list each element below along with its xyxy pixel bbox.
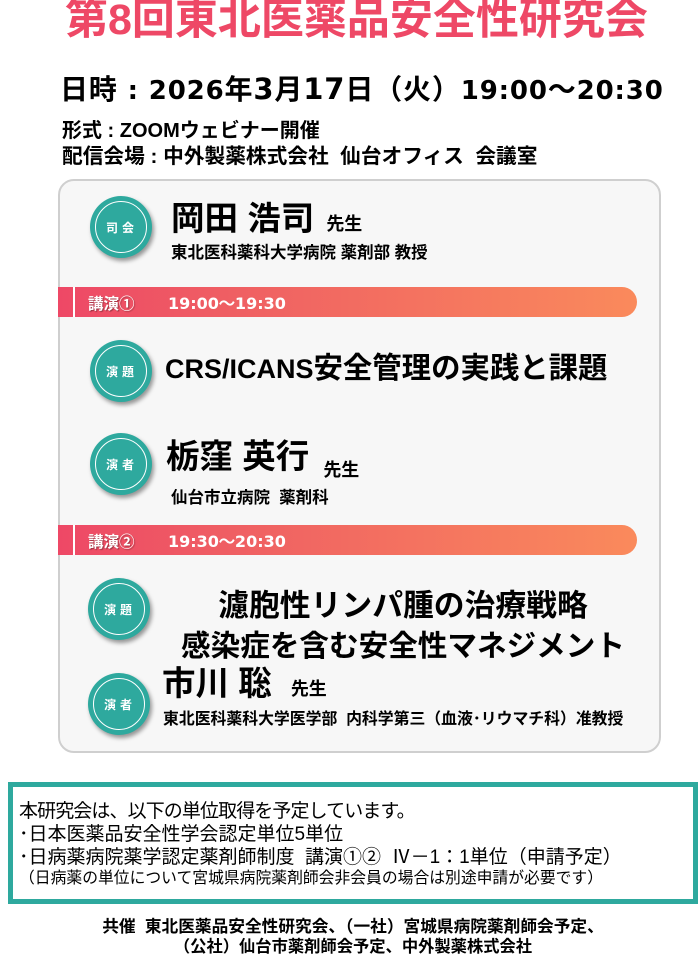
lecture 1 speaker badge (90, 433, 152, 495)
moderator affiliation: 東北医科薬科大学病院 薬剤部 教授 (171, 244, 428, 262)
lecture 2 speaker affiliation: 東北医科薬科大学医学部 内科学第三（血液･リウマチ科）准教授 (163, 711, 623, 728)
moderator name: 岡田 浩司 先生 (171, 201, 362, 238)
lecture 1 bar: 講演① (88, 296, 135, 313)
format and venue (62, 120, 537, 168)
moderator badge (90, 196, 152, 258)
moderator badge: 司会 (106, 221, 138, 235)
format and venue: 形式 : ZOOMウェビナー開催 (62, 120, 320, 142)
lecture 2 title (181, 588, 625, 663)
credits text: 本研究会は、以下の単位取得を予定しています。 (19, 801, 415, 822)
lecture 2 title: 濾胞性リンパ腫の治療戦略 (218, 588, 588, 623)
lecture 1 speaker name: 栃窪 英行 先生 (166, 439, 359, 480)
lecture 2 speaker badge: 演者 (104, 698, 136, 712)
date and time: 日時 : 2026年3月17日（火）19:00～20:30 (60, 72, 664, 106)
co-hosts (102, 917, 604, 955)
lecture 2 title badge (88, 578, 150, 640)
co-hosts: 共催 東北医薬品安全性研究会、（一社）宮城県病院薬剤師会予定、 (102, 917, 604, 936)
lecture 2 bar (58, 525, 637, 555)
lecture 2 bar: 講演② (88, 534, 135, 551)
lecture 2 speaker name: 市川 聡 先生 (162, 666, 327, 703)
credits text: ･日本医薬品安全性学会認定単位5単位 (19, 824, 343, 845)
lecture 1 speaker badge: 演者 (106, 458, 138, 472)
lecture 1 bar (58, 287, 637, 317)
credits text: ･日病薬病院薬学認定薬剤師制度 講演①② Ⅳ－1：1単位（申請予定） (19, 847, 622, 868)
lecture 2 title badge: 演題 (104, 603, 136, 617)
panel: programme (58, 179, 661, 753)
lecture 2 bar: 19:30～20:30 (168, 532, 286, 551)
format and venue: 配信会場 : 中外製薬株式会社 仙台オフィス 会議室 (62, 145, 537, 168)
lecture 1 title badge (90, 340, 152, 402)
credits text (19, 801, 622, 887)
lecture 1 bar: 19:00～19:30 (168, 294, 286, 313)
credits box (8, 782, 698, 904)
lecture 2 speaker badge (88, 673, 150, 735)
credits text: （日病薬の単位について宮城県病院薬剤師会非会員の場合は別途申請が必要です） (19, 870, 603, 887)
lecture 1 speaker affiliation: 仙台市立病院 薬剤科 (171, 489, 329, 507)
lecture 1 title: CRS/ICANS安全管理の実践と課題 (165, 352, 607, 385)
lecture 1 title badge: 演題 (106, 365, 138, 379)
lecture 2 title: 感染症を含む安全性マネジメント (181, 630, 625, 663)
